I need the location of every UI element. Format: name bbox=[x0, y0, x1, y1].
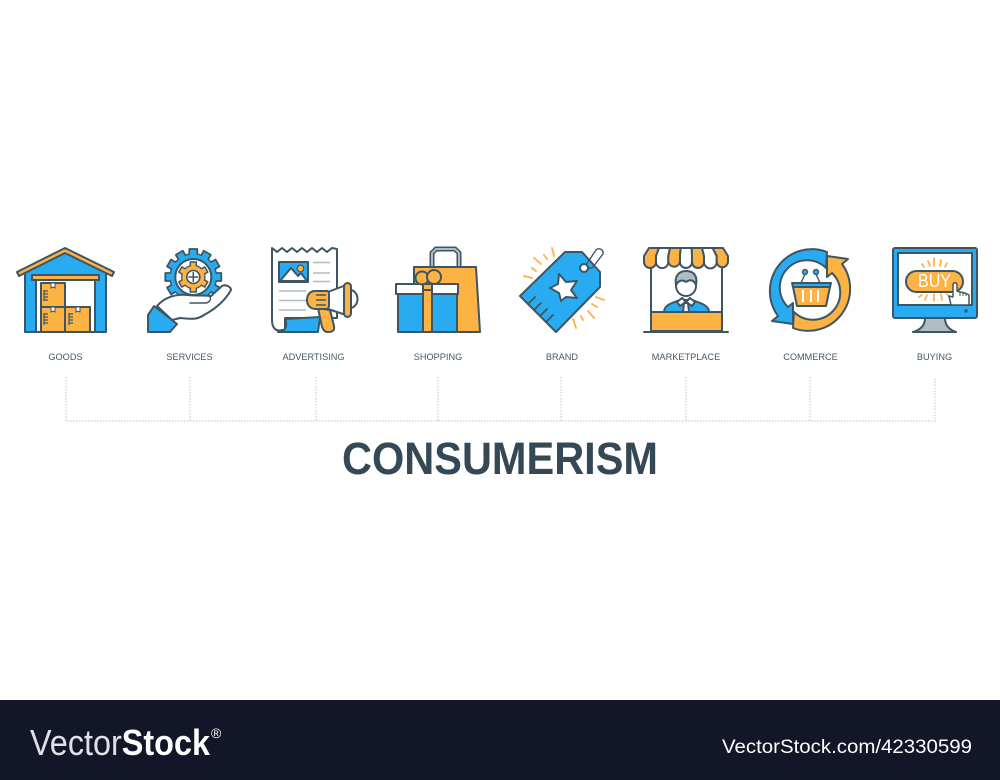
footer url: VectorStock.com/42330599 bbox=[722, 737, 972, 758]
footer logo: VectorStock bbox=[30, 722, 211, 763]
title: CONSUMERISM bbox=[342, 433, 658, 484]
label: shopping: SHOPPING bbox=[414, 352, 462, 362]
label: buying: BUYING bbox=[917, 352, 952, 362]
label: brand: BRAND bbox=[546, 352, 578, 362]
footer band bbox=[0, 700, 1000, 780]
icon: marketplace stall bbox=[644, 248, 728, 332]
logo registered mark: ® bbox=[211, 725, 222, 741]
icon: commerce cycle with basket bbox=[770, 249, 850, 331]
icon: advertising newspaper and megaphone bbox=[272, 248, 358, 332]
label: goods: GOODS bbox=[48, 352, 83, 362]
button text: BUY: BUY bbox=[918, 271, 951, 291]
icon: shopping bag and gift bbox=[396, 249, 480, 332]
label: advertising: ADVERTISING bbox=[282, 352, 345, 362]
icon: buying monitor bbox=[893, 248, 977, 332]
connector: dotted bracket bbox=[66, 377, 935, 421]
label: marketplace: MARKETPLACE bbox=[652, 352, 720, 362]
label: services: SERVICES bbox=[166, 352, 213, 362]
icon: goods warehouse bbox=[17, 248, 114, 332]
icon: brand price tag bbox=[520, 248, 604, 332]
label: commerce: COMMERCE bbox=[783, 352, 838, 362]
icon: services gear in hand bbox=[148, 249, 231, 332]
